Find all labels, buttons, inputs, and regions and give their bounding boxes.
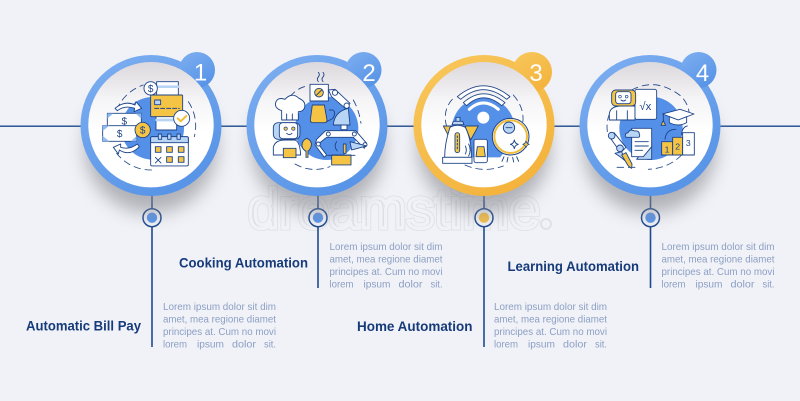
description 2: ipsum	[364, 280, 390, 290]
description 4: principes at. Cum no movi	[662, 267, 774, 278]
step 4: Learning Automation	[508, 52, 775, 290]
description 1	[163, 302, 276, 350]
icon: learning robot: 1	[665, 145, 670, 155]
circle 3 with number badge	[414, 52, 554, 213]
marker 4	[642, 209, 660, 227]
description 3: ipsum	[528, 340, 555, 350]
description 2: lorem	[330, 280, 354, 290]
circle 2 with number badge: 2	[362, 60, 376, 87]
description 1: dolor	[232, 340, 257, 350]
icon: learning robot: √x	[639, 101, 652, 113]
icon: bills, card and calendar	[103, 82, 196, 170]
connector 3	[483, 195, 485, 347]
description 2: principes at. Cum no movi	[330, 267, 442, 278]
heading 1: Automatic Bill Pay	[26, 318, 141, 334]
description 3: lorem	[494, 340, 518, 350]
description 3	[494, 302, 607, 350]
step 3: Home Automation	[357, 52, 607, 350]
circle 3 with number badge: 3	[529, 60, 543, 87]
circle 1 with number badge: 1	[194, 60, 207, 86]
description 2: sit.	[430, 280, 442, 290]
description 4	[662, 242, 775, 290]
step 1: Automatic Bill Pay	[26, 52, 276, 350]
icon: bills, card and calendar: $	[117, 129, 123, 140]
icon: bills, card and calendar: $	[122, 116, 128, 127]
marker 2	[309, 209, 327, 227]
icon: smart home devices	[443, 86, 529, 169]
description 1: principes at. Cum no movi	[163, 327, 276, 338]
description 3: Lorem ipsum dolor sit dim	[494, 302, 607, 313]
circle 4 with number badge: 4	[696, 60, 709, 87]
step 2: Cooking Automation	[179, 52, 443, 290]
description 3: dolor	[563, 340, 588, 350]
description 3: amet, mea regione diamet	[494, 314, 607, 326]
circle 2 with number badge	[246, 52, 388, 213]
watermark: dreamstime	[248, 177, 540, 240]
heading 2: Cooking Automation	[179, 256, 308, 270]
description 1: lorem	[163, 340, 187, 350]
circle 1 with number badge	[80, 52, 222, 213]
connector 2	[317, 195, 319, 288]
description 4: sit.	[762, 280, 774, 290]
description 2: dolor	[398, 280, 423, 290]
connector 1	[151, 195, 153, 347]
circle 4 with number badge	[580, 52, 720, 213]
description 4: lorem	[662, 280, 686, 290]
description 4: amet, mea regione diamet	[662, 254, 775, 266]
icon: cooking robot	[273, 72, 367, 169]
icon: learning robot	[607, 85, 694, 169]
description 1: amet, mea regione diamet	[163, 314, 276, 326]
description 4: dolor	[730, 280, 755, 290]
heading 4: Learning Automation	[508, 259, 639, 274]
marker 3	[475, 209, 493, 227]
description 2: Lorem ipsum dolor sit dim	[330, 242, 442, 253]
marker 1	[143, 209, 161, 227]
description 1: Lorem ipsum dolor sit dim	[163, 302, 276, 313]
description 3: principes at. Cum no movi	[494, 327, 607, 338]
heading 3: Home Automation	[357, 319, 472, 334]
icon: learning robot: 3	[686, 138, 691, 148]
description 4: Lorem ipsum dolor sit dim	[662, 242, 774, 253]
icon: learning robot: 2	[675, 141, 680, 151]
description 1: ipsum	[197, 340, 224, 350]
icon: bills, card and calendar: $	[148, 84, 154, 95]
description 3: sit.	[595, 340, 607, 350]
description 2: amet, mea regione diamet	[330, 254, 443, 266]
watermark: dreamstime	[248, 177, 540, 240]
description 2	[330, 242, 443, 290]
connector 4	[650, 195, 652, 288]
icon: bills, card and calendar: $	[140, 126, 146, 137]
description 1: sit.	[264, 340, 276, 350]
description 4: ipsum	[696, 280, 722, 290]
horizontal timeline	[0, 126, 800, 127]
